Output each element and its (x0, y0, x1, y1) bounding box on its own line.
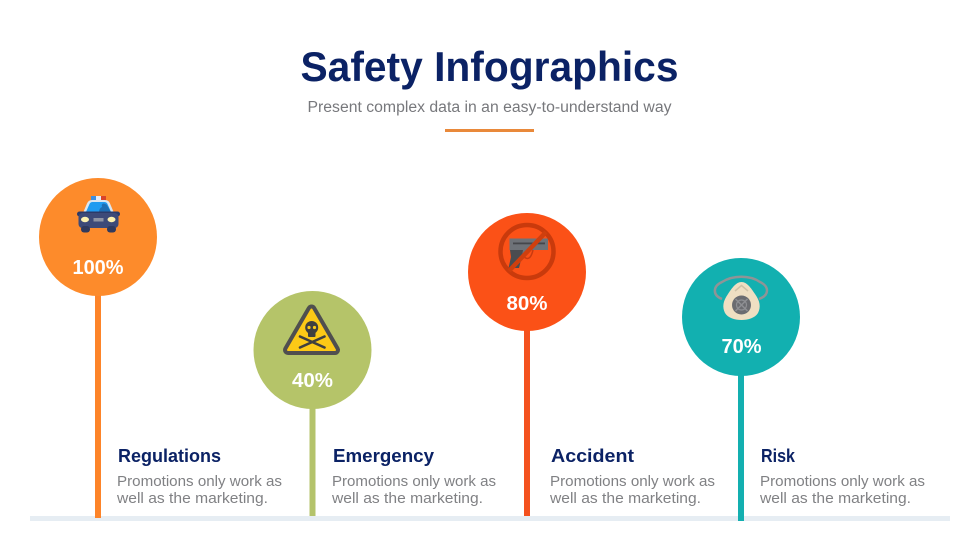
title accent line (445, 129, 534, 132)
baseline (30, 516, 950, 521)
heading: risk: Risk (761, 445, 796, 466)
circle: emergency (254, 291, 372, 409)
text: accident: Promotions only work as (550, 474, 715, 490)
icon: skull warning sign (288, 310, 335, 350)
text: emergency: well as the marketing. (331, 491, 483, 507)
icon: respirator mask (715, 277, 767, 320)
value: 100%: 100% (72, 257, 124, 279)
heading: regulations: Regulations (118, 445, 221, 466)
heading: emergency: Emergency (333, 445, 435, 466)
circle: accident (468, 213, 586, 331)
text: regulations: well as the marketing. (116, 491, 268, 507)
circle: risk (682, 258, 800, 376)
subtitle: Present complex data in an easy-to-understand way (308, 99, 672, 116)
text: accident: well as the marketing. (549, 491, 701, 507)
text: emergency: Promotions only work as (332, 474, 496, 490)
heading: accident: Accident (551, 445, 634, 466)
panel: emergency (254, 291, 496, 516)
circle: regulations (39, 178, 157, 296)
icon: prohibited gun (500, 225, 554, 278)
text: regulations: Promotions only work as (117, 474, 282, 490)
stem: accident (524, 326, 530, 516)
stem: emergency (310, 405, 316, 516)
panel: accident (468, 213, 715, 516)
text: risk: Promotions only work as (760, 474, 925, 490)
value: 40%: 40% (292, 370, 333, 392)
panel: regulations (39, 178, 282, 518)
value: 70%: 70% (722, 336, 762, 358)
stem: regulations (95, 290, 101, 518)
stem: risk (738, 370, 744, 521)
title: Safety Infographics (300, 43, 678, 90)
panel: risk (682, 258, 925, 521)
value: 80%: 80% (506, 293, 548, 315)
text: risk: well as the marketing. (759, 491, 911, 507)
icon: police car (77, 196, 120, 232)
